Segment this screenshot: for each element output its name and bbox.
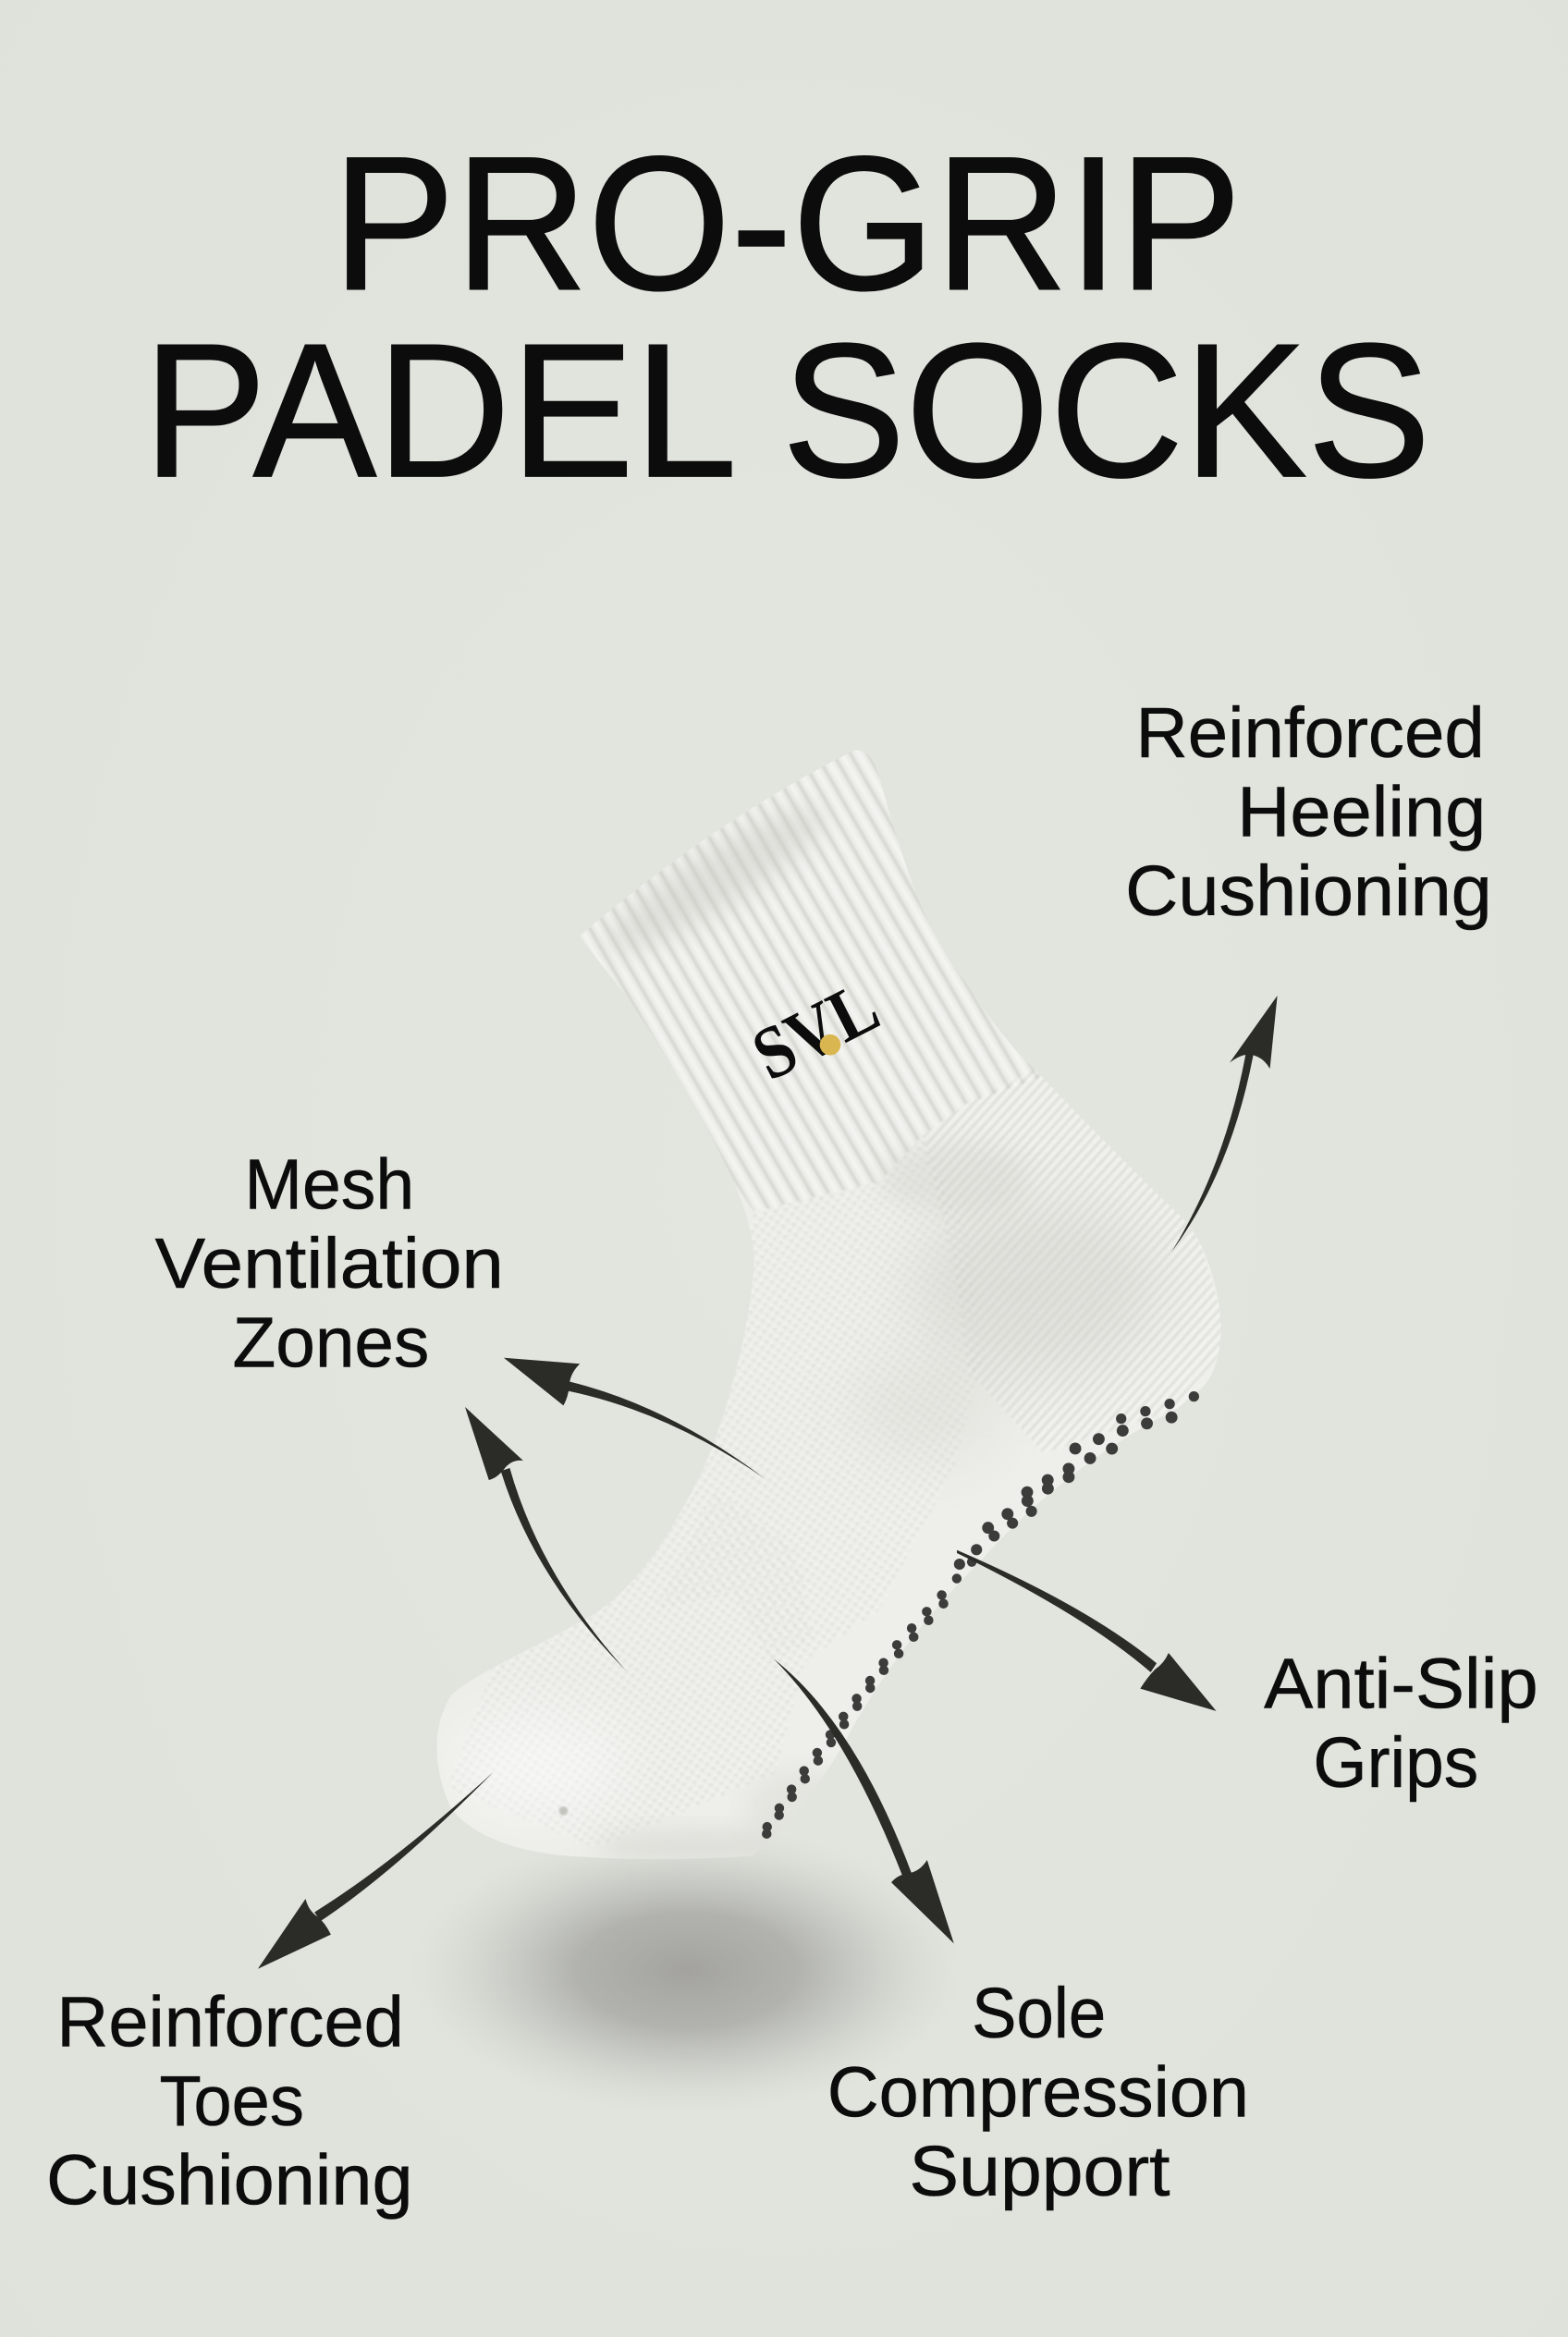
SVL logo: SVL: [740, 965, 891, 1096]
arrow: to Reinforced Heeling Cushioning: [1171, 996, 1278, 1252]
label: Sole Compression Support: Support: [909, 2132, 1170, 2211]
title: [143, 116, 1431, 517]
arrow: to Sole Compression Support: [774, 1658, 954, 1943]
label: Reinforced Heeling Cushioning: Cushioning: [1125, 851, 1492, 931]
label: Sole Compression Support: Compression: [827, 2052, 1249, 2132]
sock illustration: [433, 730, 1252, 1878]
label: Reinforced Toes Cushioning: Cushioning: [46, 2140, 413, 2220]
grip dots: [757, 1397, 1194, 1842]
title: PADEL SOCKS: [143, 303, 1431, 517]
label: Mesh Ventilation Zones: Mesh: [244, 1145, 414, 1225]
label: Sole Compression Support: Sole: [972, 1974, 1106, 2053]
arrow: lower mesh arrow: [465, 1407, 626, 1670]
drop shadow under sock: [411, 1828, 962, 2113]
label: Reinforced Heeling Cushioning: Heeling: [1237, 772, 1486, 851]
arrow: to Reinforced Toes Cushioning: [258, 1772, 494, 1969]
sock body: [437, 751, 1220, 1859]
label: Reinforced Heeling Cushioning: Reinforced: [1135, 693, 1485, 773]
label: Sole Compression Support: [827, 1974, 1249, 2211]
label: Reinforced Toes Cushioning: Reinforced: [56, 1983, 404, 2062]
label: Anti-Slip Grips: Grips: [1313, 1723, 1478, 1803]
arrow: to Anti-Slip Grips: [957, 1550, 1217, 1711]
label: Mesh Ventilation Zones: Ventilation: [155, 1224, 504, 1303]
label: Anti-Slip Grips: [1264, 1645, 1538, 1803]
title: PRO-GRIP: [333, 116, 1242, 330]
label: Reinforced Toes Cushioning: [46, 1983, 413, 2220]
label: Mesh Ventilation Zones: Zones: [232, 1303, 429, 1382]
label: Mesh Ventilation Zones: [155, 1145, 504, 1382]
sock shading and knit texture: [433, 730, 1252, 1878]
label: Anti-Slip Grips: Anti-Slip: [1264, 1645, 1538, 1724]
arrow: upper mesh arrow: [504, 1358, 765, 1478]
label: Reinforced Heeling Cushioning: [1125, 693, 1492, 931]
label: Reinforced Toes Cushioning: Toes: [160, 2062, 304, 2141]
